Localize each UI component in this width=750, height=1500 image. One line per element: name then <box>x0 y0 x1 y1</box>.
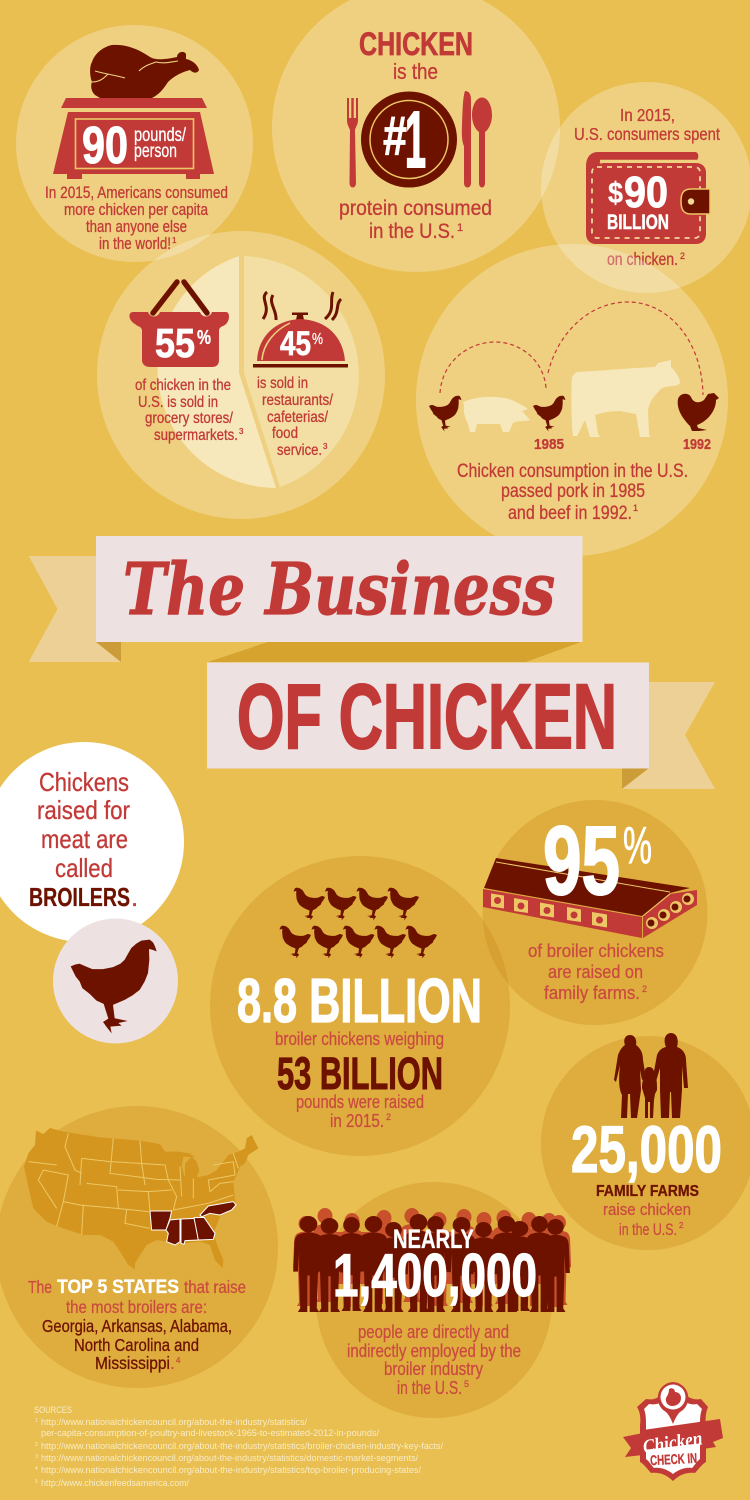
icon: spoon <box>472 98 492 188</box>
icon: basket <box>129 282 229 367</box>
dashed arc: pork to chicken <box>440 342 546 393</box>
circle background <box>16 25 253 262</box>
statistic: 1,400,000: 1,400,000 <box>333 1242 537 1309</box>
caption: family farms. <box>544 982 640 1003</box>
caption: raise chicken <box>603 1201 691 1219</box>
caption: North Carolina and <box>74 1335 199 1355</box>
sources: http://www.nationalchickencouncil.org/about-the-industry/statistics/broiler-chicken-industry-key-facts/ <box>41 1441 443 1451</box>
caption: food service: restaurants/ <box>262 392 333 409</box>
caption: food service: service. <box>277 442 322 459</box>
intro text: In 2015, <box>620 105 675 125</box>
caption: of broiler chickens <box>528 940 664 961</box>
icon: plate with number one <box>361 92 457 188</box>
sources: per-capita-consumption-of-poultry-and-livestock-1965-to-estimated-2012-in-pounds/ <box>41 1428 379 1438</box>
banner: Of Chicken <box>207 662 715 789</box>
icon: back row of workers <box>293 1208 571 1307</box>
white circle <box>0 742 184 942</box>
banner title: The Business <box>123 547 555 631</box>
caption <box>28 1277 246 1373</box>
definition text: meat are <box>41 824 128 854</box>
caption: TOP 5 STATES <box>57 1277 179 1298</box>
caption: protein consumed <box>339 197 492 220</box>
sources: SOURCES <box>34 1405 72 1415</box>
caption: grocery: 3 <box>239 427 244 436</box>
panel: nearly 1,400,000 jobs <box>293 1182 571 1418</box>
icon: farm family <box>614 1033 688 1118</box>
icon: logo chicken <box>666 1388 681 1406</box>
caption <box>457 460 688 524</box>
caption: 4 <box>176 1356 181 1365</box>
caption: 2 <box>642 984 647 994</box>
label: pounds raised: in 2015. <box>330 1111 384 1131</box>
sources <box>34 1405 443 1488</box>
caption: grocery: grocery stores/ <box>145 410 233 427</box>
icon: basket: % <box>197 327 211 349</box>
caption: in the U.S. <box>369 220 455 243</box>
logo shield <box>637 1396 708 1481</box>
icon: basket: 55 <box>155 320 195 366</box>
icon: cloche: 45 <box>280 325 311 363</box>
wallet amount: $ <box>608 177 623 210</box>
logo pin <box>658 1382 688 1424</box>
panel: 25,000 family farms <box>541 1033 750 1250</box>
sources: 5 <box>35 1479 38 1485</box>
circle background <box>316 1182 552 1418</box>
caption: are raised on <box>548 961 643 982</box>
icon: chicken barn <box>483 858 697 938</box>
ribbon fold right <box>622 768 649 789</box>
caption <box>339 197 492 243</box>
caption: . <box>170 1353 175 1373</box>
sources: http://www.nationalchickencouncil.org/about-the-industry/statistics/ <box>41 1417 307 1427</box>
circle background <box>210 856 510 1156</box>
caption: food service <box>257 375 333 459</box>
caption: on chicken. <box>607 249 678 269</box>
sources: http://www.chickenfeedsamerica.com/ <box>41 1478 189 1488</box>
caption: Mississippi <box>95 1353 170 1373</box>
caption: grocery: supermarkets. <box>154 427 238 444</box>
circle background <box>416 244 728 556</box>
icon: cow <box>571 360 680 437</box>
ribbon fold left <box>96 642 121 662</box>
year labels: 1985 <box>534 436 564 453</box>
caption <box>347 1322 521 1398</box>
caption: and beef in 1992. <box>508 502 632 524</box>
statistic: 95 percent: 95 <box>543 806 620 915</box>
logo word Chicken: Chicken <box>641 1427 704 1459</box>
caption <box>45 184 228 253</box>
sources: 4 <box>35 1466 38 1472</box>
caption: grocery: U.S. is sold in <box>138 394 218 411</box>
panel: broilers definition <box>0 742 184 1044</box>
statistic: 53 billion: 53 BILLION <box>277 1048 443 1099</box>
icon: pig <box>463 397 530 432</box>
icon: big chicken <box>71 940 157 1033</box>
wallet amount: BILLION <box>607 211 669 234</box>
label: broiler chickens weighing: broiler chickens weighing <box>275 1029 444 1049</box>
caption: broiler industry <box>384 1359 483 1379</box>
definition text: called <box>55 853 113 883</box>
icon: chicken start <box>429 396 461 431</box>
icon: flock of chickens <box>279 888 437 958</box>
sources: http://www.nationalchickencouncil.org/about-the-industry/statistics/top-broiler-producing-states/ <box>41 1465 421 1475</box>
icon: scale <box>53 98 214 179</box>
icon: roast turkey <box>90 45 199 98</box>
icon: cloche <box>253 292 348 368</box>
circle background <box>97 231 385 519</box>
logo: Chicken Check In <box>623 1382 723 1481</box>
year labels <box>534 436 711 453</box>
icon: fork <box>347 98 358 188</box>
circle background <box>0 1106 278 1388</box>
caption: that raise <box>184 1277 246 1297</box>
icon: knife <box>462 91 471 188</box>
sources: 1 <box>35 1418 38 1424</box>
caption: food service: food <box>272 425 298 442</box>
circle background <box>541 1036 750 1250</box>
caption: grocery <box>135 377 244 444</box>
definition text: Chickens <box>39 767 129 797</box>
panel: 90 billion spent <box>541 82 750 293</box>
banner: The Business <box>29 536 582 662</box>
wallet amount <box>607 168 669 234</box>
statistic: 8.8 billion: 8.8 BILLION <box>237 967 482 1036</box>
pie slice: food service 45 percent <box>244 256 359 487</box>
caption: food service: 3 <box>323 442 328 451</box>
panel: passed pork and beef <box>416 244 728 556</box>
caption: passed pork in 1985 <box>501 480 645 502</box>
caption: food service: cafeterias/ <box>267 409 328 426</box>
caption: indirectly employed by the <box>347 1341 521 1361</box>
sources: 2 <box>35 1442 38 1448</box>
caption: 2 <box>680 251 685 261</box>
sources: 3 <box>35 1454 38 1460</box>
statistic label: nearly: NEARLY <box>393 1224 474 1254</box>
caption: more chicken per capita <box>64 201 209 219</box>
caption: people are directly and <box>358 1322 509 1342</box>
caption: In 2015, Americans consumed <box>45 184 228 202</box>
ribbon tail right <box>622 682 715 789</box>
heading: CHICKEN <box>359 26 473 62</box>
logo pin inner circle <box>660 1384 686 1410</box>
label: family farms: FAMILY FARMS <box>596 1183 699 1200</box>
panel: pie of sales <box>97 231 385 519</box>
caption: The <box>28 1277 52 1297</box>
logo ribbon <box>623 1419 723 1457</box>
label: pounds raised <box>296 1092 424 1131</box>
scale reading: pounds/ <box>134 125 187 146</box>
circle background <box>541 82 750 293</box>
caption <box>603 1201 691 1239</box>
circle background <box>272 0 560 272</box>
caption: grocery: of chicken in the <box>135 377 231 394</box>
caption: in the U.S. <box>397 1378 462 1398</box>
logo word Check In: CHECK IN <box>650 1450 697 1468</box>
pie slice: grocery 55 percent <box>158 256 276 488</box>
icon: cloche: % <box>312 331 323 348</box>
caption: Georgia, Arkansas, Alabama, <box>42 1316 232 1336</box>
dashed arc: beef to chicken <box>548 302 703 395</box>
caption: 1 <box>172 236 177 245</box>
panel: 90 pounds per person <box>16 25 253 262</box>
caption: 1 <box>457 222 463 234</box>
caption: in the U.S. <box>619 1221 677 1239</box>
icon: wallet <box>586 152 710 244</box>
icon: hen 1992 <box>678 393 719 431</box>
chicken circle <box>53 918 178 1044</box>
banner plate <box>207 662 649 768</box>
caption: Chicken consumption in the U.S. <box>457 460 688 482</box>
panel: family farms percentage <box>482 800 708 1025</box>
panel: 8.8 billion <box>210 856 510 1156</box>
caption: in the world! <box>99 235 171 253</box>
logo shield interior <box>644 1402 702 1474</box>
scale reading: person <box>134 141 177 162</box>
definition text: BROILERS <box>29 882 130 912</box>
icon: plate with number one: 1 <box>405 95 426 184</box>
scale reading <box>82 117 187 175</box>
caption: food service: is sold in <box>257 375 308 392</box>
caption: 5 <box>464 1379 469 1389</box>
caption: 1 <box>633 503 638 513</box>
label: pounds raised: 2 <box>386 1112 391 1122</box>
circle background <box>482 800 708 1025</box>
caption: than anyone else <box>86 218 187 236</box>
map of the United States <box>24 1128 258 1269</box>
icon: plate with number one: # <box>383 104 407 167</box>
caption: the most broilers are: <box>66 1297 207 1317</box>
panel: number one protein <box>272 0 560 272</box>
definition text: . <box>131 882 138 912</box>
icon: front row of workers <box>293 1214 570 1312</box>
year labels: 1992 <box>683 436 711 453</box>
definition text: raised for <box>37 795 130 825</box>
ribbon tail left <box>29 556 121 662</box>
intro text <box>574 105 720 144</box>
label: pounds raised: pounds were raised <box>296 1092 424 1112</box>
scale reading: 90 <box>82 117 128 175</box>
definition text <box>29 767 138 912</box>
caption <box>528 940 664 1003</box>
sources: http://www.nationalchickencouncil.org/about-the-industry/statistics/domestic-market-segments/ <box>41 1453 418 1463</box>
intro text: U.S. consumers spent <box>574 124 720 144</box>
caption: 2 <box>679 1221 684 1230</box>
banner shadow <box>208 642 581 662</box>
icon: chicken 1985 <box>533 396 565 431</box>
statistic: 95 percent: % <box>623 817 652 875</box>
subheading: is the <box>393 59 438 84</box>
wallet amount: 90 <box>624 168 668 217</box>
banner plate <box>96 536 582 642</box>
panel: top 5 states <box>0 1106 278 1388</box>
